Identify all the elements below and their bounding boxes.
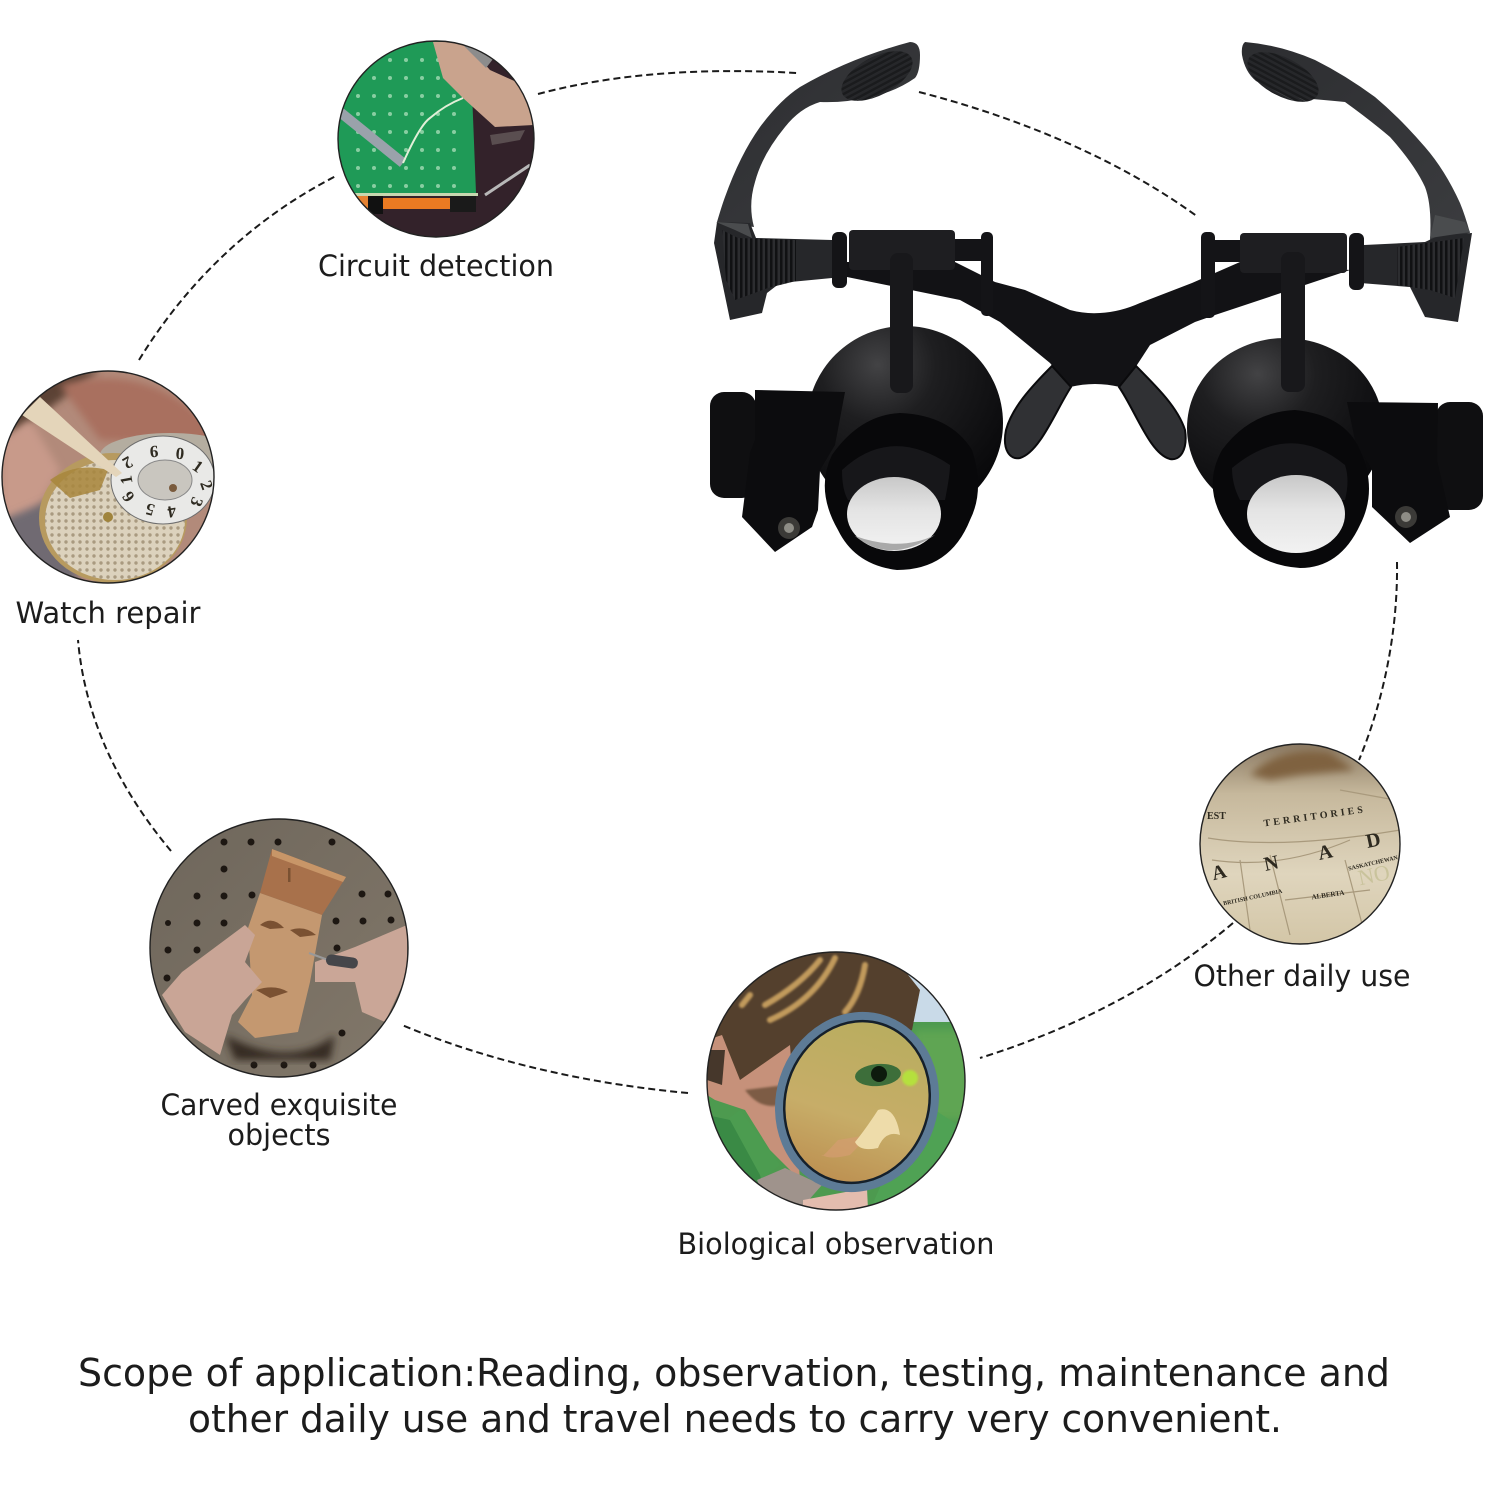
icon: circuit detection photo <box>338 41 534 237</box>
left temple pad <box>834 41 920 111</box>
main frame bridge <box>847 262 1350 387</box>
left temple arm <box>717 42 920 227</box>
left nose pad <box>1005 366 1071 458</box>
icon: map photo: A <box>1316 840 1335 865</box>
icon: watch repair photo: 2 <box>119 452 136 473</box>
product photo: headband magnifier glasses <box>710 41 1483 570</box>
label: other daily use: Other daily use <box>1194 959 1410 993</box>
label: carved exquisite objects: objects <box>228 1118 330 1152</box>
right hinge with ribbed grip <box>1360 233 1472 322</box>
caption: scope of application <box>78 1351 1390 1441</box>
label: watch repair: Watch repair <box>16 596 201 630</box>
right temple arm <box>1242 42 1470 240</box>
right led lamp <box>1347 402 1483 543</box>
caption: scope of application: Scope of application:Reading, observation, testing, maintenance and <box>78 1351 1390 1395</box>
left loupe lens <box>825 413 978 570</box>
caption: scope of application: other daily use and travel needs to carry very convenient. <box>188 1397 1282 1441</box>
right eye dome <box>1187 338 1383 518</box>
right temple pad <box>1240 42 1326 112</box>
icon: watch repair photo: 4 <box>166 501 178 522</box>
left axle and collars <box>832 230 993 316</box>
left eye dome <box>807 326 1003 520</box>
icon: map photo: SASKATCHEWAN <box>1348 855 1399 872</box>
icon: carved objects photo <box>150 819 408 1077</box>
icon: map photo <box>1200 744 1400 944</box>
label: circuit detection: Circuit detection <box>318 249 554 283</box>
right loupe lens <box>1213 410 1369 568</box>
left hinge with ribbed grip <box>714 222 832 320</box>
icon: watch repair photo: 1 <box>116 474 137 486</box>
left lens arm <box>890 253 913 393</box>
icon: map photo: TERRITORIES <box>1263 805 1364 829</box>
icon: map photo: BRITISH COLUMBIA <box>1223 889 1284 907</box>
left led lamp <box>710 390 845 552</box>
label: carved exquisite objects <box>160 1088 398 1152</box>
icon: watch repair photo: 5 <box>144 499 157 520</box>
icon: watch repair photo: 3 <box>186 495 207 509</box>
icon: map photo: NO <box>1356 859 1392 890</box>
right axle and collars <box>1201 232 1364 318</box>
right nose pad <box>1119 366 1186 459</box>
label: carved exquisite objects: Carved exquisite <box>160 1088 398 1122</box>
icon: watch repair photo: 1 <box>189 456 207 477</box>
icon: map photo: A <box>1209 860 1229 885</box>
icon: biological observation photo <box>707 952 970 1210</box>
icon: watch repair photo: 9 <box>149 442 159 461</box>
icon: watch repair photo: 0 <box>175 444 185 463</box>
label: biological observation: Biological observation <box>678 1227 994 1261</box>
icon: map photo: D <box>1364 828 1383 853</box>
icon: map photo: N <box>1262 851 1281 876</box>
icon: watch repair photo: 6 <box>118 488 139 506</box>
icon: watch repair photo <box>2 371 240 583</box>
icon: map photo: ALBERTA <box>1311 889 1345 901</box>
dashed connection ring <box>78 71 1397 1093</box>
icon: watch repair photo: 2 <box>196 478 217 492</box>
icon: map photo: EST <box>1207 811 1226 822</box>
shadow under the carving <box>225 1035 335 1060</box>
right lens arm <box>1281 252 1305 392</box>
